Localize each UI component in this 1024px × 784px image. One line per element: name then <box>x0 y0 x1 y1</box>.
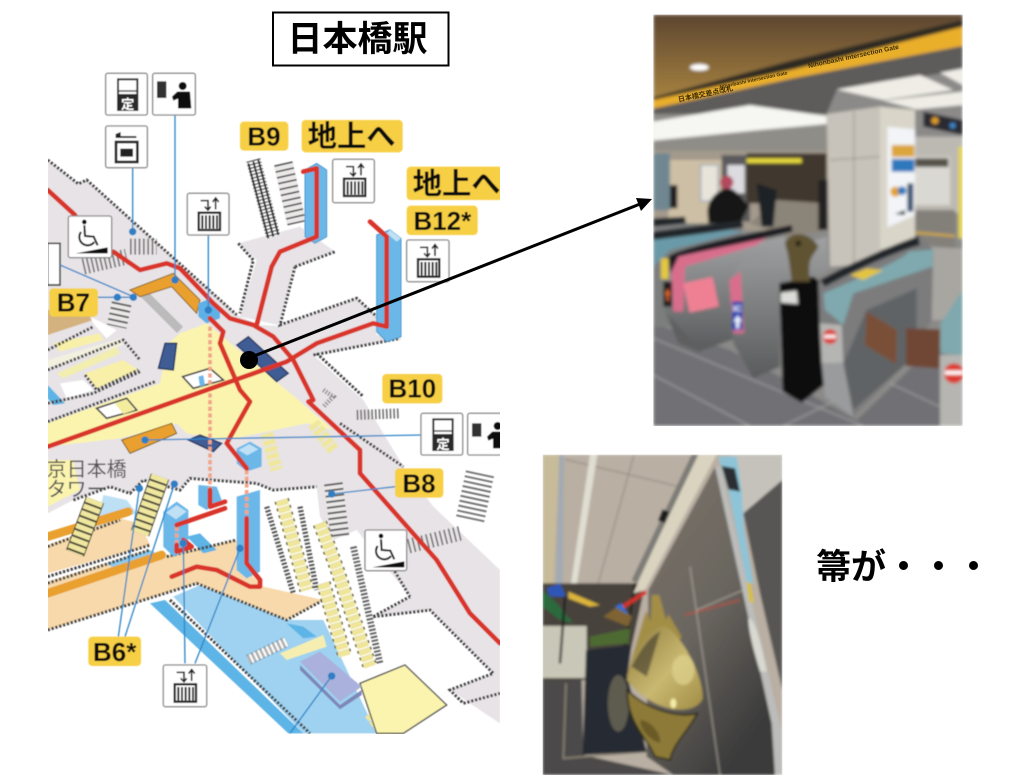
pillar <box>827 107 880 267</box>
sign text <box>677 44 900 104</box>
exit label: B9: B9 <box>247 122 281 152</box>
building name: タワー <box>47 478 107 501</box>
lower beam <box>653 46 963 114</box>
poster <box>887 127 915 227</box>
blue gate <box>818 236 940 417</box>
wall and cleaning tools <box>543 455 559 583</box>
steel edge <box>715 467 782 775</box>
pink gate <box>661 225 793 352</box>
floor: peach platforms and blue track bed <box>48 495 377 733</box>
icon: elevator 4 <box>163 665 207 707</box>
exit label: B8 <box>395 468 443 498</box>
building name: 京日本橋 <box>47 458 127 481</box>
exit label: to surface 2: 地上へ <box>413 168 501 201</box>
photo: ticket gates <box>653 15 964 426</box>
icon: staff <box>153 73 195 115</box>
icon: coin locker <box>106 126 147 168</box>
title <box>273 12 448 66</box>
icon: ticket machine: 定 <box>121 97 134 112</box>
exit label: B7 <box>49 288 98 318</box>
black stand <box>583 645 647 755</box>
station map <box>47 73 510 737</box>
exit label: B6: B6* <box>93 637 137 667</box>
blue gate top <box>718 457 753 583</box>
back gates <box>653 223 743 327</box>
right hall <box>915 137 963 213</box>
floor: yellow concourse <box>48 323 333 507</box>
orange kiosks <box>122 273 200 453</box>
back hall ceiling <box>653 114 828 151</box>
elevators <box>163 163 401 578</box>
accessible routes <box>48 168 500 643</box>
icon: staff 2 <box>466 412 500 456</box>
icon: elevator 2 <box>333 159 374 203</box>
icon: wheelchair ramp 2 <box>365 530 407 571</box>
exit label: B10: B10 <box>388 374 436 404</box>
icon: ticket machine <box>106 73 147 115</box>
back hall walls <box>653 151 828 231</box>
icon: elevator 3 <box>407 240 449 282</box>
title: 日本橋駅 <box>287 20 428 59</box>
icon: wheelchair ramp <box>68 216 112 258</box>
top-right tile <box>730 455 782 513</box>
stairs and escalators <box>75 160 480 737</box>
floor: grey concourse <box>48 160 500 723</box>
right gate edge <box>940 290 964 426</box>
pillar edge <box>633 455 717 593</box>
exit label: B12: B12* <box>413 206 472 236</box>
second gate <box>729 237 828 378</box>
icon: elevator <box>187 193 229 235</box>
brass head <box>627 595 703 760</box>
pale yellow landing <box>360 665 447 733</box>
exit label: B8: B8 <box>402 468 436 498</box>
caption: 箒が・・・ <box>816 548 991 587</box>
photo: brass statue <box>543 455 782 775</box>
floor <box>653 323 963 426</box>
icon: ticket machine 2: 定 <box>436 437 450 452</box>
sign text: Nihonbashi Intersection Gate <box>808 44 900 70</box>
ceiling: wood <box>653 15 963 97</box>
sign band: yellow <box>653 27 963 109</box>
steel panel <box>647 467 780 775</box>
sign text: Nihonbashi Intersection Gate <box>719 70 788 91</box>
ticket gates <box>158 337 288 452</box>
pointer arrow <box>240 198 652 369</box>
people <box>707 188 749 223</box>
floor: upper-left platform block <box>48 243 155 422</box>
building name <box>47 458 127 501</box>
icon: ticket machine 2 <box>421 413 463 455</box>
leader lines <box>60 115 421 733</box>
second gate: IC <box>733 304 742 314</box>
lilac block <box>300 652 362 709</box>
floor <box>543 680 673 775</box>
exit label: B7: B7 <box>57 288 90 318</box>
sign text: 日本橋交差点改札 <box>677 84 734 104</box>
exit label: B9 <box>240 122 288 152</box>
exit label: to surface: 地上へ <box>308 121 396 154</box>
statue pedestal <box>779 234 824 403</box>
